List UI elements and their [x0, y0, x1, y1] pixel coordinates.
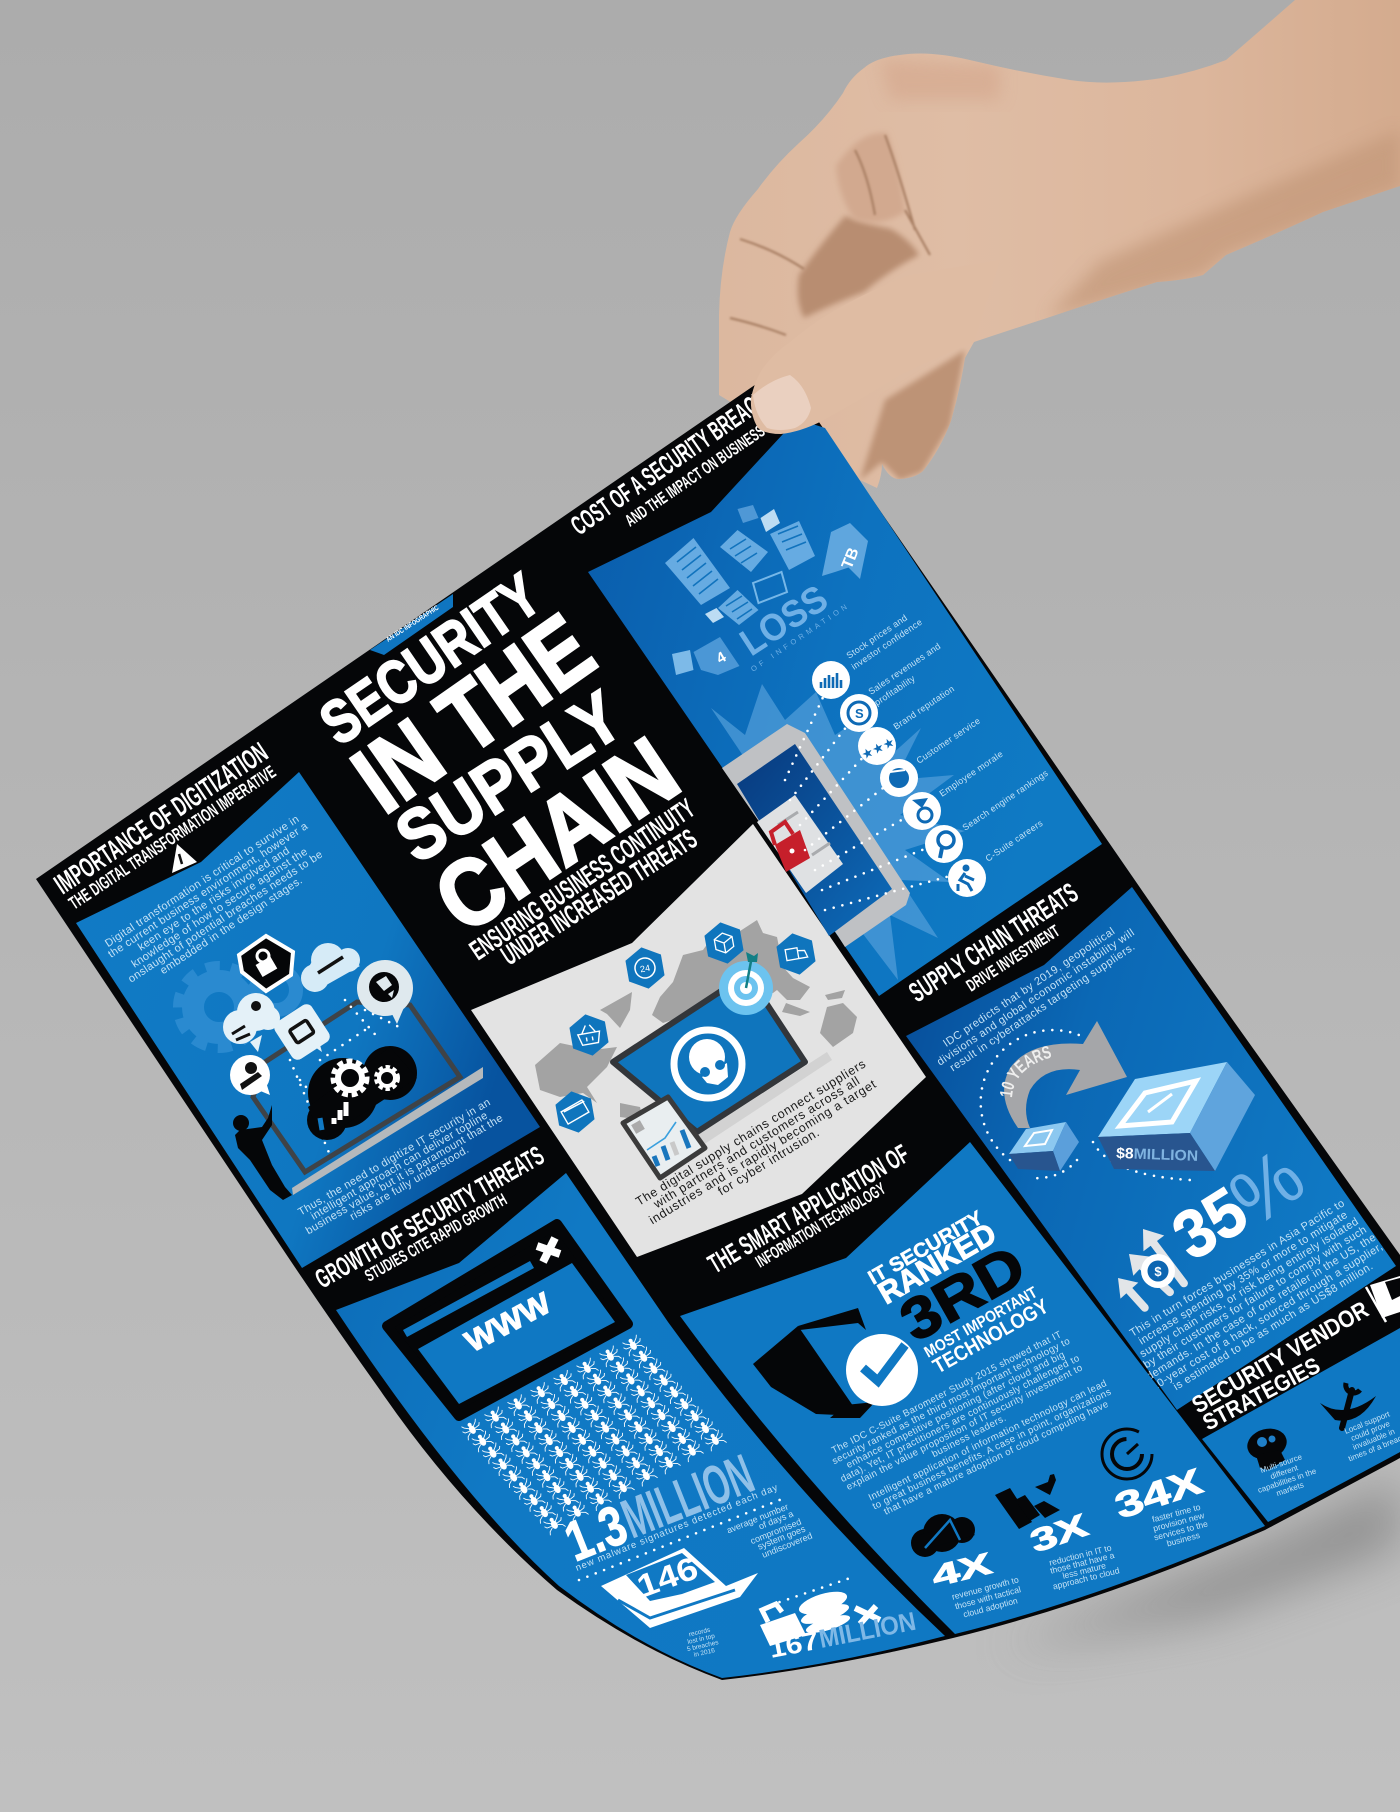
thumbnail — [753, 375, 811, 430]
decorative gear — [179, 967, 296, 1047]
impact labels: investor confidence — [850, 617, 924, 672]
asia pacific paragraph: by their customers for failure to comply with such — [1142, 1224, 1369, 1371]
subheading: STUDIES CITE RAPID GROWTH — [362, 1190, 510, 1285]
stat: 167 million: MILLION — [816, 1606, 918, 1654]
asia pacific paragraph: demands. In the case of one retailer in the US, the — [1144, 1231, 1379, 1383]
bug grid — [460, 1334, 727, 1536]
impact labels: Employee morale — [938, 749, 1005, 799]
text: of information: OF INFORMATION — [749, 602, 849, 674]
icon: tools — [1320, 1383, 1376, 1428]
heading: supply chain threats: SUPPLY CHAIN THREATS — [903, 877, 1083, 1008]
title: security: SECURITY — [308, 560, 552, 758]
browser window: WWW — [460, 1287, 557, 1359]
icon: cross — [855, 1606, 880, 1624]
text: loss: LOSS — [733, 578, 836, 665]
stat: 1.3 million: MILLION — [613, 1442, 762, 1550]
panel: smart application — [680, 1139, 1265, 1634]
icon: tb tag — [822, 523, 868, 579]
benefits paragraph: to great business benefits. A case in point, organizations — [871, 1387, 1113, 1512]
it security ranked block: 3RD — [889, 1233, 1036, 1354]
stat: 4x: revenue growth to — [951, 1574, 1020, 1602]
records text — [683, 1625, 722, 1660]
caption paragraph: with partners and customers across all — [650, 1073, 863, 1212]
heading: importance of digitization: IMPORTANCE OF DIGITIZATION — [49, 736, 273, 900]
idc paragraph: divisions and global economic instability will — [935, 927, 1137, 1068]
subtitle line two: UNDER INCREASED THREATS — [495, 823, 702, 971]
local support text: invaluable in — [1351, 1427, 1396, 1452]
big box: $8MILLION — [1116, 1145, 1198, 1165]
panel: growth of security threats — [310, 1140, 945, 1678]
stat: 34x — [1102, 1429, 1211, 1551]
ten years arrow: 10 YEARS — [1000, 1046, 1051, 1098]
stat: 4x: 4X — [929, 1547, 995, 1594]
intro paragraph: the current business environment, however a — [106, 820, 311, 961]
local support text: Local support — [1343, 1409, 1392, 1436]
icon: hexagon truck — [775, 930, 817, 978]
stat: 3x: those that have a — [1049, 1550, 1116, 1576]
days text: system goes — [756, 1523, 807, 1552]
usb drive — [672, 637, 740, 675]
icon: red lock — [771, 822, 810, 872]
impact labels: C-Suite careers — [984, 818, 1045, 864]
silhouette figure — [233, 1105, 292, 1200]
ten years arrow — [1000, 1021, 1127, 1128]
panel: vendor strategies — [1202, 1328, 1400, 1522]
stat: 34x: business — [1166, 1530, 1201, 1548]
local support text — [1337, 1407, 1400, 1463]
asia pacific paragraph: is estimated to be as much as US$8 million. — [1171, 1260, 1376, 1393]
days text: compromised — [749, 1517, 803, 1546]
records text: in 2016 — [693, 1647, 716, 1659]
tag: an idc infographic: AN IDC INFOGRAPHIC — [385, 605, 440, 644]
stat: 1.3 million: 1.3 — [556, 1492, 635, 1573]
hand thumb over paper — [751, 260, 1000, 434]
barometer paragraph: security ranked as the third most important technology to — [830, 1336, 1072, 1467]
closing paragraph: business value, but it is paramount that the — [304, 1112, 505, 1237]
stat: 34x: provision new — [1152, 1510, 1206, 1533]
subheading: THE DIGITAL TRANSFORMATION IMPERATIVE — [65, 762, 279, 913]
big box — [1098, 1062, 1255, 1171]
barometer paragraph: data). Yet, IT practitioners are continuously challenged to — [839, 1353, 1082, 1485]
heading band: security vendor strategies: STRATEGIES — [1198, 1352, 1324, 1435]
stat: 4x: those with tactical — [954, 1584, 1022, 1611]
icon: rss cloud — [223, 993, 280, 1052]
days text: average number — [725, 1502, 790, 1535]
dotted rule — [579, 1499, 782, 1580]
records text: records — [688, 1627, 712, 1638]
multi-source text — [1251, 1449, 1321, 1503]
intro paragraph: knowledge of how to secure against the — [130, 846, 310, 970]
heading band: security vendor strategies: SECURITY VENDOR — [1188, 1296, 1373, 1419]
stat: 3x: less mature — [1061, 1560, 1107, 1581]
intro paragraph: onslaught of potential breaches needs to be — [126, 848, 325, 985]
impact labels — [845, 612, 1050, 864]
icon: globe bubble — [357, 960, 413, 1024]
impact labels: Sales revenues and — [867, 641, 943, 697]
caption paragraph: for cyber intrusion. — [715, 1125, 822, 1198]
icon: up arrows with dollar: $ — [1154, 1264, 1162, 1279]
icon: black gear cloud — [307, 1046, 417, 1140]
stat caption: new malware signatures detected each day — [574, 1482, 780, 1574]
barometer paragraph: The IDC C-Suite Barometer Study 2015 showed that IT — [830, 1329, 1064, 1456]
title: supply: SUPPLY — [383, 676, 636, 878]
icon: c-suite — [948, 859, 986, 897]
world map — [535, 920, 857, 1120]
asia pacific paragraph: 10-year cost of a hack, sourced through a supplier, — [1150, 1241, 1385, 1393]
icon: speed gauge — [1102, 1429, 1152, 1479]
multi-source text: capabilities in the — [1257, 1466, 1318, 1495]
intro paragraph: embedded in the design stages. — [158, 875, 305, 977]
it security ranked block — [865, 1207, 1053, 1378]
title: chain: CHAIN — [417, 717, 696, 953]
impact icons — [812, 661, 986, 897]
icon: cloud — [911, 1514, 975, 1557]
stat: 1.3 million — [556, 1442, 762, 1573]
panel: supply chain threats — [903, 877, 1396, 1410]
days text — [725, 1502, 814, 1560]
records text: 5 breaches — [686, 1639, 720, 1653]
stat: 3x: reduction in IT to — [1048, 1542, 1113, 1568]
laptop 146 — [601, 1548, 758, 1628]
tablet chart — [623, 1097, 705, 1178]
icon: sales revenue: S — [855, 706, 864, 721]
heading: cost of breach: COST OF A SECURITY BREACH — [565, 385, 773, 541]
impact labels: Brand reputation — [892, 683, 956, 732]
paper shadow — [1000, 1480, 1400, 1650]
idc paragraph: result in cyberattacks targeting suppliers. — [948, 941, 1138, 1074]
icon: tablet bubble — [272, 1002, 332, 1062]
icon: shield with tick — [753, 1308, 918, 1418]
stat: 34x: 34X — [1110, 1460, 1207, 1527]
stat: 34x: faster time to — [1151, 1502, 1202, 1524]
intro paragraph: Digital transformation is critical to survive in — [103, 813, 302, 950]
barometer paragraph: explain the value proposition of IT security investment to — [845, 1362, 1085, 1493]
tag: an idc infographic — [370, 594, 453, 655]
icon: hexagon basket — [568, 1011, 610, 1059]
asia pacific paragraph: increase spending by 35% or more to mitigate — [1137, 1209, 1350, 1347]
icon: shield — [239, 936, 293, 991]
subheading: INFORMATION TECHNOLOGY — [752, 1179, 889, 1271]
icon: lock — [760, 1604, 806, 1646]
subheading: AND THE IMPACT ON BUSINESS — [622, 421, 768, 530]
panel: supply chain map — [471, 824, 926, 1257]
multi-source text: Multi-source — [1259, 1452, 1304, 1475]
icon: up arrows with dollar — [1109, 1221, 1194, 1316]
icon: skull — [689, 1039, 728, 1085]
impact labels: Stock prices and — [845, 612, 909, 661]
it security ranked block: TECHNOLOGY — [929, 1295, 1053, 1378]
icon: hexagon card — [554, 1088, 596, 1136]
icon: bars — [995, 1474, 1060, 1529]
stat: 3x: 3X — [1026, 1506, 1093, 1560]
stat: 3x: approach to cloud — [1052, 1565, 1121, 1591]
icon: hexagon 24 hours: 24 — [639, 963, 651, 974]
stat: 35 percent: 35 — [1160, 1173, 1260, 1275]
intro paragraph: keen eye to the risks involved and — [136, 845, 292, 954]
icon: sales revenue — [840, 694, 878, 732]
stat: 167 million — [766, 1606, 918, 1664]
laptop with cloud icons — [223, 936, 483, 1200]
benefits paragraph: Intelligent application of information technology can lead — [867, 1378, 1109, 1504]
title block — [308, 560, 702, 971]
stat: 35 percent — [1160, 1132, 1320, 1275]
panel: cost of a security breach — [565, 385, 1102, 996]
caption paragraph: industries and is rapidly becoming a target — [647, 1077, 879, 1227]
small box — [1009, 1122, 1079, 1171]
multi-source text: markets — [1275, 1480, 1305, 1498]
hand behind paper — [719, 0, 1400, 488]
it security ranked block: MOST IMPORTANT — [922, 1284, 1041, 1361]
icon: hexagon 24 hours — [624, 944, 666, 992]
records text: lost in top — [687, 1633, 716, 1646]
icon: person bubble — [230, 1055, 270, 1095]
laptop 146: 146 — [632, 1550, 703, 1605]
paper sheet — [36, 367, 1400, 1680]
dotted rule — [771, 1576, 856, 1605]
usb drive: 4 — [714, 648, 730, 667]
panel: importance of digitization — [49, 736, 540, 1268]
intro paragraph — [100, 811, 334, 996]
icon: hexagon boxes — [703, 919, 745, 967]
title: in the: IN THE — [335, 594, 612, 833]
icon: warning triangle — [172, 844, 197, 873]
icon: head with gears — [1244, 1424, 1290, 1470]
laptop with skull — [613, 974, 832, 1145]
icon: morale — [903, 792, 941, 830]
barometer paragraph — [825, 1327, 1091, 1502]
caption paragraph: The digital supply chains connect suppliers — [633, 1056, 869, 1209]
it security ranked block: IT SECURITY — [865, 1207, 987, 1289]
icon: phone cloud — [301, 943, 360, 992]
icons: scattered documents — [665, 505, 815, 625]
icon: customer service — [880, 759, 918, 797]
icon: brand stars: ★★★ — [859, 734, 897, 762]
impact labels: Search engine rankings — [961, 768, 1050, 833]
asia pacific paragraph: This in turn forces businesses in Asia Pacific to — [1128, 1197, 1347, 1340]
barometer paragraph: enhance competitive positioning (after cloud and big — [845, 1349, 1067, 1471]
it security ranked block: RANKED — [872, 1216, 1002, 1311]
icon: tb tag: TB — [839, 545, 863, 571]
heading: THE SMART APPLICATION OF — [703, 1139, 914, 1279]
subtitle line one: ENSURING BUSINESS CONTINUITY — [464, 793, 700, 966]
local support text: could prove — [1350, 1419, 1392, 1443]
browser window — [387, 1224, 628, 1416]
starburst — [711, 684, 965, 980]
barometer paragraph: business leaders. — [930, 1413, 1008, 1460]
icon: search — [925, 825, 963, 863]
laptop with lock — [722, 724, 910, 947]
dotted rings — [981, 1030, 1190, 1180]
multi-source text: different — [1269, 1463, 1300, 1481]
closing paragraph: intelligent approach can deliver topline — [309, 1109, 490, 1223]
idc paragraph: IDC predicts that by 2019, geopolitical — [941, 925, 1118, 1050]
stat: 4x: cloud adoption — [962, 1595, 1019, 1619]
benefits paragraph: that have a mature adoption of cloud computing have — [882, 1399, 1111, 1518]
days text: undiscovered — [760, 1531, 814, 1560]
icon: target — [719, 952, 773, 1015]
impact labels: profitability — [873, 673, 917, 708]
subheading: DRIVE INVESTMENT — [963, 921, 1063, 995]
heading: growth: GROWTH OF SECURITY THREATS — [310, 1140, 549, 1294]
stat: 3x — [995, 1474, 1121, 1591]
stat: 35 percent: % — [1213, 1132, 1320, 1243]
closing paragraph: Thus, the need to digitize IT security in an — [296, 1096, 493, 1219]
asia pacific paragraph — [1120, 1192, 1391, 1403]
stat: 167 million: 167 — [766, 1625, 821, 1664]
days text: of days a — [757, 1509, 795, 1532]
stat: 4x — [911, 1514, 1025, 1621]
icon: stock prices — [812, 661, 850, 699]
stat: 34x: services to the — [1153, 1518, 1209, 1542]
asia pacific paragraph: supply chain risks, or risk being entirely isolated — [1138, 1215, 1361, 1360]
impact labels: Customer service — [915, 716, 982, 766]
closing paragraph: risks are fully understood. — [348, 1144, 471, 1223]
dotted connectors — [785, 695, 950, 910]
icon: database — [796, 1587, 852, 1636]
